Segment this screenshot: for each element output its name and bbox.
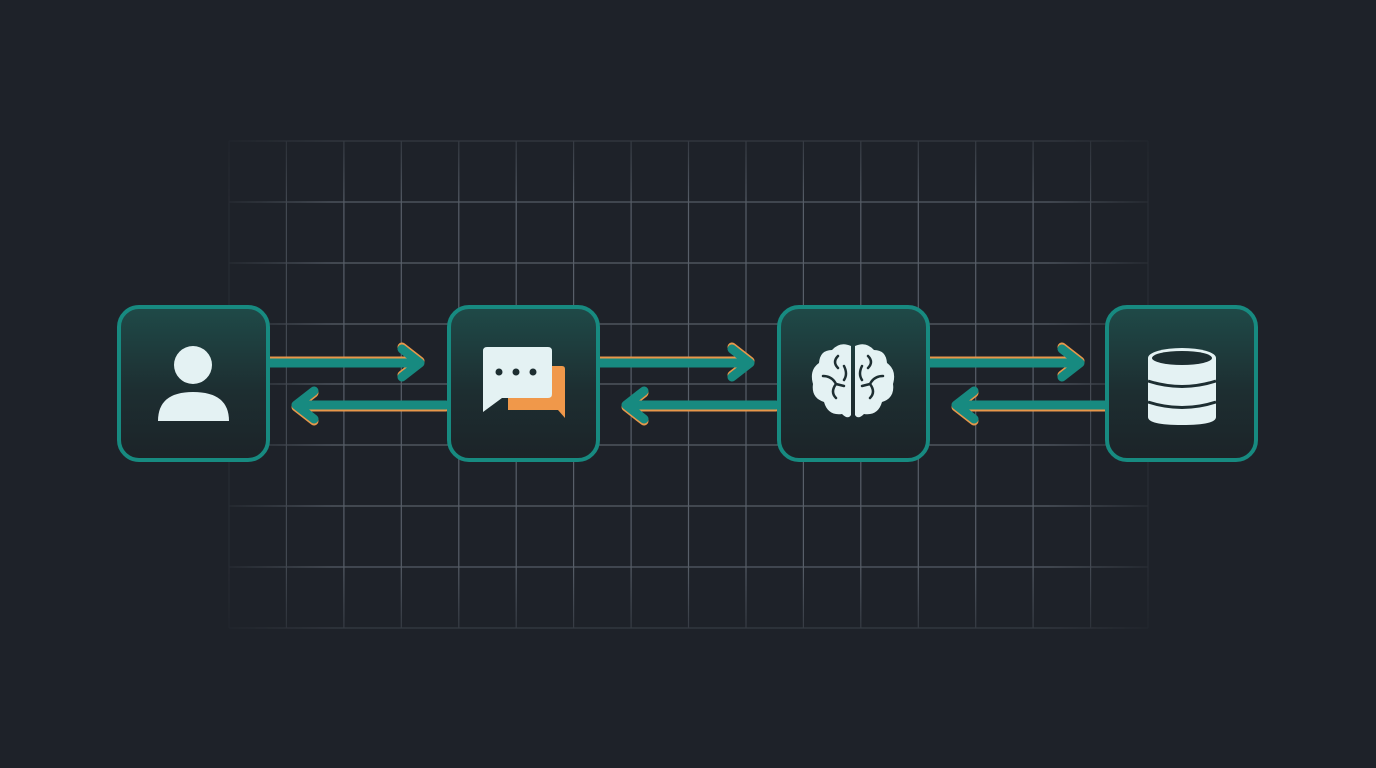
node: chat bbox=[449, 307, 598, 460]
arrows: chat to brain bbox=[600, 347, 776, 421]
arrows: user to chat bbox=[270, 347, 446, 421]
icon: user bbox=[158, 346, 229, 421]
icon: chat bubbles bbox=[483, 347, 565, 418]
node: user bbox=[119, 307, 268, 460]
icon: brain bbox=[812, 344, 894, 417]
icon: database bbox=[1148, 348, 1216, 425]
arrows: brain to database bbox=[930, 347, 1106, 421]
node: brain bbox=[779, 307, 928, 460]
node: database bbox=[1107, 307, 1256, 460]
